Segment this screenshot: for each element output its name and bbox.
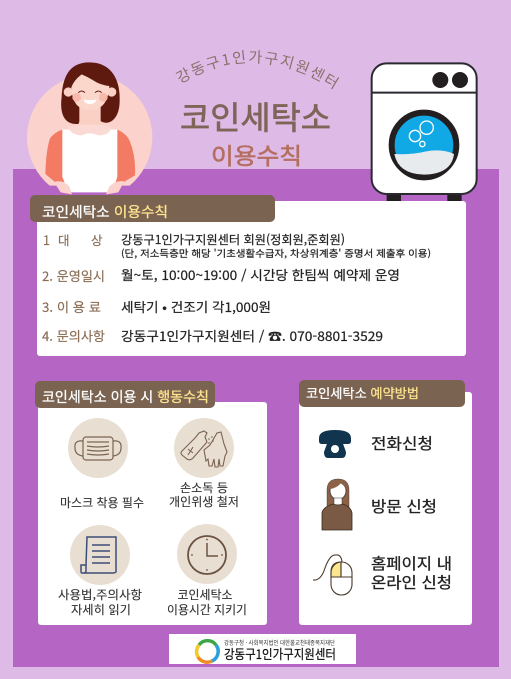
caption: sanitizer: [169, 479, 239, 510]
footer logo: [169, 634, 356, 664]
icon: document: [70, 525, 130, 585]
logo ring: [197, 641, 218, 662]
caption: clock: 코인세탁소: [178, 586, 232, 603]
caption: clock: [167, 586, 247, 618]
row 4: contact: 4. 문의사항: [42, 326, 105, 345]
text: homepage: 홈페이지 내: [371, 552, 452, 574]
row 1: target: 상: [91, 230, 103, 249]
row 4: contact: 강동구1인가구지원센터 / ☎. 070-8801-3529: [121, 326, 383, 345]
caption: document: [58, 586, 142, 618]
panel: purple background: [13, 169, 499, 667]
icon: sanitizer: [174, 418, 234, 478]
row 1: target: 1: [43, 230, 50, 249]
caption: mask: 마스크 착용 필수: [60, 494, 144, 511]
icon: mask: [68, 418, 128, 478]
caption: sanitizer: 손소독 등: [180, 479, 228, 496]
row 1: target: (단, 저소득층만 해당 '기초생활수급자, 차상위계층' 증명서 제출후 이용): [121, 246, 431, 260]
icon: person: [322, 479, 352, 530]
icon: telephone: [319, 430, 351, 458]
icon: mouse: [313, 555, 352, 595]
text: phone: 전화신청: [371, 432, 433, 454]
text: homepage: 온라인 신청: [371, 571, 452, 593]
heading bar: reservation methods: 코인세탁소 예약방법: [306, 383, 419, 402]
row 2: hours: 2. 운영일시: [42, 266, 105, 285]
heading bar: reservation methods: [299, 380, 465, 407]
illustration: washing machine: [372, 63, 477, 202]
heading bar: usage rules: 코인세탁소 이용수칙: [42, 202, 168, 222]
text: visit: 방문 신청: [371, 495, 437, 517]
text: homepage: [371, 552, 452, 593]
panel: usage rules: [30, 195, 466, 356]
caption: sanitizer: 개인위생 철저: [169, 493, 239, 510]
row 1: target: 대: [58, 230, 70, 249]
caption: document: 사용법,주의사항: [58, 586, 142, 603]
heading bar: code of conduct: [35, 381, 215, 408]
icon: clock: [177, 524, 237, 584]
subtitle: 이용수칙: [211, 137, 302, 171]
row 3: fee: 세탁기 • 건조기 각1,000원: [121, 297, 271, 316]
illustration: woman: [27, 62, 152, 194]
caption: clock: 이용시간 지키기: [167, 601, 247, 618]
panel: code of conduct: [35, 381, 267, 625]
subtitle arc: center name: 강동구1인가구지원센터: [176, 50, 339, 90]
row 2: hours: 월~토, 10:00~19:00 / 시간당 한팀씩 예약제 운영: [121, 265, 400, 284]
row 3: fee: [42, 297, 271, 316]
row 1: target: 강동구1인가구지원센터 회원(정회원,준회원): [121, 231, 345, 248]
heading bar: usage rules: [30, 195, 275, 222]
footer logo: 강동구1인가구지원센터: [224, 644, 336, 663]
heading bar: code of conduct: 코인세탁소 이용 시 행동수칙: [42, 387, 209, 407]
title: 코인세탁소: [180, 93, 331, 139]
caption: document: 자세히 읽기: [71, 601, 131, 618]
footer logo: 강동구청 · 사회복지법인 대한불교천태종복지재단: [224, 638, 335, 647]
panel: reservation methods: [299, 380, 472, 625]
row 1: target: [43, 230, 431, 260]
row 3: fee: 3. 이 용 료: [42, 297, 101, 316]
